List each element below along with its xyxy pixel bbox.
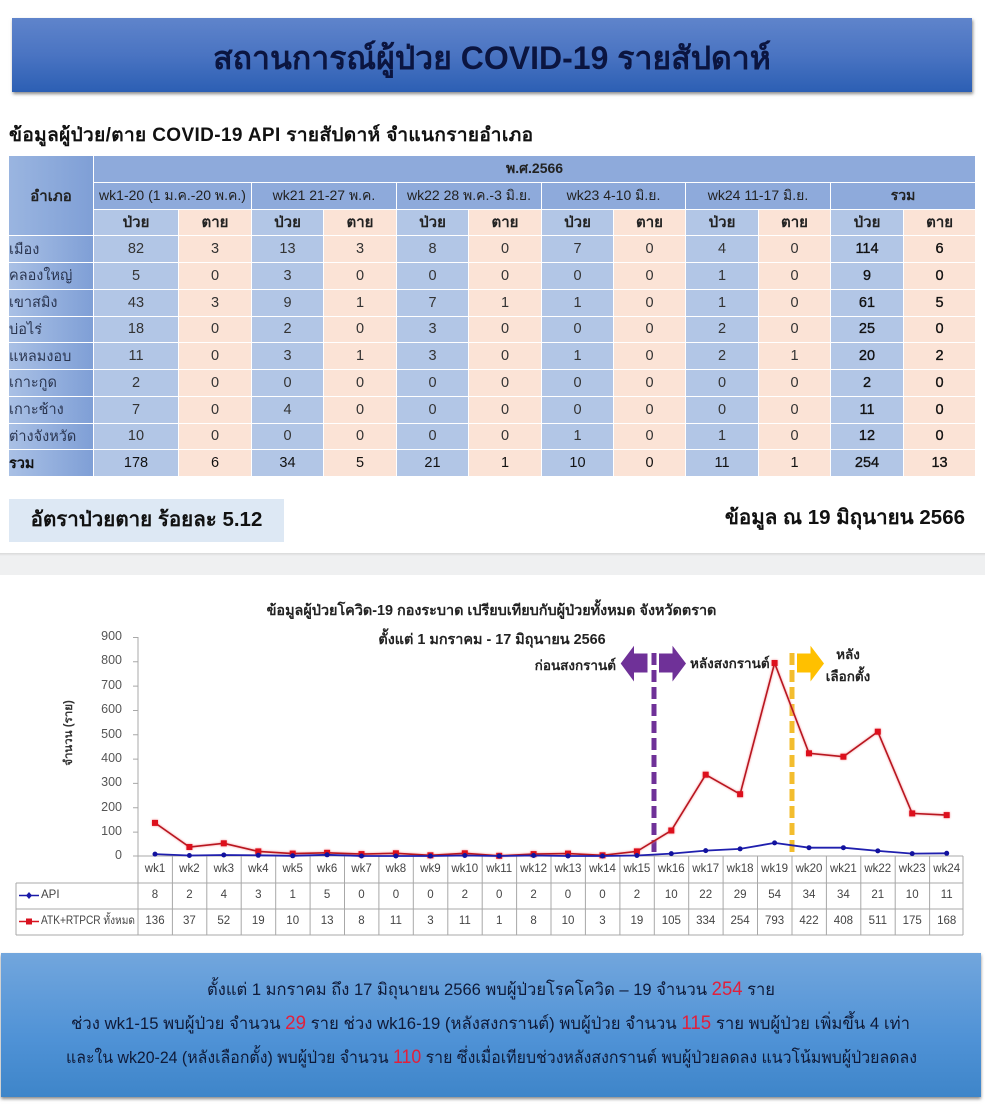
ATK+RTPCR row: 136 <box>145 915 165 927</box>
data table: cases and deaths by district: 13 <box>279 241 296 257</box>
data table: cases and deaths by district: 0 <box>573 268 582 284</box>
week labels: wk7 <box>350 863 372 875</box>
arrow: before Songkran <box>621 646 648 682</box>
data table: cases and deaths by district: 0 <box>790 375 799 391</box>
data table: cases and deaths by district <box>9 156 975 476</box>
data table: cases and deaths by district: 0 <box>211 321 219 337</box>
y axis: 300 <box>101 775 122 789</box>
data table: cases and deaths by district: 0 <box>790 402 799 418</box>
data table: cases and deaths by district: อำเภอ <box>30 188 72 205</box>
ATK+RTPCR row: 8 <box>530 915 537 927</box>
API row: API <box>41 889 60 901</box>
data table: cases and deaths by district: 12 <box>859 428 875 444</box>
data table: cases and deaths by district: 0 <box>645 455 654 471</box>
data table: cases and deaths by district: 0 <box>211 375 219 391</box>
data table: cases and deaths by district: 1 <box>501 455 509 471</box>
data table: cases and deaths by district: เกาะกูด <box>9 375 57 391</box>
data table: cases and deaths by district: 0 <box>501 348 509 364</box>
data table: cases and deaths by district: 0 <box>283 428 292 444</box>
ATK+RTPCR row: 168 <box>937 915 956 927</box>
table heading: ข้อมูลผู้ป่วย/ตาย COVID-19 API รายสัปดาห์ จำแนกรายอำเภอ <box>9 125 533 146</box>
API row: 4 <box>221 889 228 901</box>
week labels: wk2 <box>178 863 200 875</box>
y axis: 700 <box>101 678 122 692</box>
data table: cases and deaths by district: wk21 21-27 พ.ค. <box>273 187 375 203</box>
data table: cases and deaths by district: เกาะช้าง <box>9 402 64 418</box>
data table: cases and deaths by district: 0 <box>790 295 799 311</box>
data table: cases and deaths by district: 9 <box>863 268 871 284</box>
data table: cases and deaths by district: 5 <box>132 268 140 284</box>
y axis: 400 <box>101 751 122 765</box>
data table: cases and deaths by district: 0 <box>356 428 364 444</box>
ATK+RTPCR row <box>19 912 956 927</box>
arrow: after Songkran <box>659 646 686 682</box>
data table: cases and deaths by district: 0 <box>790 428 799 444</box>
data table: cases and deaths by district: 0 <box>356 268 364 284</box>
summary panel <box>1 953 981 1097</box>
data table: cases and deaths by district: 34 <box>279 455 296 471</box>
API row: 22 <box>699 889 712 901</box>
data table: cases and deaths by district: 0 <box>573 402 582 418</box>
ATK+RTPCR row: 10 <box>562 915 574 927</box>
y axis: 200 <box>101 800 122 814</box>
API line series <box>152 840 949 858</box>
API row: 5 <box>324 889 330 901</box>
chart title: ข้อมูลผู้ป่วยโควิด-19 กองระบาด เปรียบเทียบกับผู้ป่วยทั้งหมด จังหวัดตราด <box>267 599 716 619</box>
week labels: wk21 <box>829 863 857 875</box>
data table: cases and deaths by district: 5 <box>936 295 944 311</box>
data table: cases and deaths by district: 0 <box>645 428 654 444</box>
chart title: ตั้งแต่ 1 มกราคม - 17 มิถุนายน 2566 <box>378 628 606 648</box>
week labels: wk13 <box>554 863 581 875</box>
ATK+RTPCR row: 19 <box>631 915 643 927</box>
week labels: wk18 <box>726 863 754 875</box>
data table: cases and deaths by district: 0 <box>428 268 437 284</box>
data table: cases and deaths by district: 21 <box>424 455 441 471</box>
API row: 2 <box>462 889 468 901</box>
data table: cases and deaths by district: 1 <box>356 348 364 364</box>
API row: 29 <box>734 889 746 901</box>
API row: 0 <box>393 889 399 901</box>
week labels: wk6 <box>316 863 337 875</box>
data table: cases and deaths by district: 3 <box>283 348 292 364</box>
data table: cases and deaths by district: 2 <box>718 348 726 364</box>
ATK+RTPCR row: 511 <box>869 915 887 927</box>
data table: cases and deaths by district: ตาย <box>347 214 373 231</box>
API row: 21 <box>871 889 884 901</box>
data table: cases and deaths by district: 0 <box>501 241 509 257</box>
data table: cases and deaths by district: 0 <box>356 375 364 391</box>
data table: cases and deaths by district: 25 <box>859 321 875 337</box>
data table: cases and deaths by district: 0 <box>936 375 944 391</box>
data table: cases and deaths by district: 2 <box>283 321 292 337</box>
week labels: wk15 <box>622 863 650 875</box>
API row: 11 <box>941 889 953 901</box>
data table: cases and deaths by district: ป่วย <box>274 214 301 231</box>
API row: 0 <box>599 889 606 901</box>
y axis: 100 <box>101 824 122 838</box>
data table: cases and deaths by district: 10 <box>569 455 586 471</box>
y axis: 600 <box>101 702 122 716</box>
data table: cases and deaths by district: 178 <box>124 455 148 471</box>
data table: cases and deaths by district: เมือง <box>9 242 39 258</box>
data table: cases and deaths by district: ป่วย <box>123 214 149 231</box>
data table: cases and deaths by district: รวม <box>891 187 915 203</box>
data table: cases and deaths by district: 0 <box>645 268 654 284</box>
data table: cases and deaths by district: 0 <box>645 321 654 337</box>
data table: cases and deaths by district: 1 <box>718 268 726 284</box>
week labels: wk23 <box>898 863 926 875</box>
data table: cases and deaths by district: 0 <box>936 321 944 337</box>
API row: 2 <box>186 889 193 901</box>
data table: cases and deaths by district: 0 <box>283 375 292 391</box>
annotation: before Songkran: ก่อนสงกรานต์ <box>535 657 616 673</box>
week labels: wk9 <box>419 863 441 875</box>
data table: cases and deaths by district: 0 <box>211 268 219 284</box>
y axis: 0 <box>115 848 122 862</box>
summary text: และใน wk20-24 (หลังเลือกตั้ง) พบผู้ป่วย จำนวน 110 ราย ซึ่งเมื่อเทียบช่วงหลังสงกรานต์ พบผู้ป่วยลดลง แนวโน้มพบผู้ป่วยลดลง <box>66 1045 917 1068</box>
data table: cases and deaths by district: 3 <box>356 241 364 257</box>
chart title <box>267 599 716 648</box>
data table: cases and deaths by district: 2 <box>936 348 944 364</box>
week labels: wk22 <box>863 863 891 875</box>
data table: cases and deaths by district: 0 <box>645 348 654 364</box>
data table: cases and deaths by district: 0 <box>936 428 944 444</box>
API row: 1 <box>289 889 296 901</box>
ATK+RTPCR row: 3 <box>427 915 434 927</box>
data table: cases and deaths by district: ต่างจังหวัด <box>9 429 76 445</box>
data table: cases and deaths by district: 2 <box>132 375 140 391</box>
data table: cases and deaths by district: 1 <box>718 428 726 444</box>
week labels: wk14 <box>588 863 617 875</box>
data table: cases and deaths by district: wk24 11-17 มิ.ย. <box>708 187 808 203</box>
week labels: wk12 <box>519 863 547 875</box>
data table: cases and deaths by district: 0 <box>428 428 437 444</box>
ATK+RTPCR row: 793 <box>765 915 784 927</box>
data table: cases and deaths by district: 4 <box>718 241 726 257</box>
data table: cases and deaths by district: 7 <box>573 241 582 257</box>
data table: cases and deaths by district: 1 <box>790 348 799 364</box>
data table: cases and deaths by district: 0 <box>428 402 437 418</box>
data table: cases and deaths by district: 0 <box>573 321 582 337</box>
API row: 3 <box>255 889 262 901</box>
data table: cases and deaths by district: 11 <box>714 455 730 471</box>
API row: 2 <box>634 889 640 901</box>
data table: cases and deaths by district: ตาย <box>636 214 663 231</box>
data table: cases and deaths by district: 3 <box>211 241 219 257</box>
week labels: wk8 <box>385 863 406 875</box>
data table: cases and deaths by district: 0 <box>936 268 944 284</box>
week labels: wk20 <box>795 863 822 875</box>
data table: cases and deaths by district: 1 <box>573 428 582 444</box>
data table: cases and deaths by district: 43 <box>128 295 144 311</box>
week labels: wk24 <box>932 863 961 875</box>
data table: cases and deaths by district: 3 <box>428 321 437 337</box>
data table: cases and deaths by district: ตาย <box>202 214 228 231</box>
week labels: wk17 <box>691 863 719 875</box>
week labels <box>144 863 961 875</box>
ATK+RTPCR row: 408 <box>834 915 853 927</box>
data table: cases and deaths by district: 254 <box>855 455 879 471</box>
API row: 10 <box>665 889 678 901</box>
data table: cases and deaths by district: 1 <box>501 295 509 311</box>
data table grid <box>16 856 963 935</box>
data table: cases and deaths by district: 61 <box>859 295 875 311</box>
data table: cases and deaths by district: 3 <box>283 268 292 284</box>
purple dashed line: Songkran <box>652 653 656 854</box>
data table: cases and deaths by district: 9 <box>283 295 292 311</box>
week labels: wk5 <box>281 863 303 875</box>
title banner: สถานการณ์ผู้ป่วย COVID-19 รายสัปดาห์ <box>213 40 771 76</box>
data table: cases and deaths by district: wk1-20 (1 ม.ค.-20 พ.ค.) <box>99 187 246 203</box>
data table: cases and deaths by district: 2 <box>863 375 871 391</box>
data table: cases and deaths by district: 7 <box>132 402 140 418</box>
API row: 0 <box>565 889 571 901</box>
data table: cases and deaths by district: 0 <box>501 402 509 418</box>
data table: cases and deaths by district: 5 <box>356 455 364 471</box>
API row: 34 <box>837 889 850 901</box>
ATK+RTPCR row: 105 <box>662 915 681 927</box>
line chart with data table <box>16 599 964 936</box>
annotation: after election: หลัง <box>836 647 860 662</box>
data table: cases and deaths by district: รวม <box>9 456 34 472</box>
data table: cases and deaths by district: 0 <box>573 375 582 391</box>
annotation: after Songkran: หลังสงกรานต์ <box>690 655 770 671</box>
ATK+RTPCR row: 11 <box>459 915 471 927</box>
title banner <box>12 18 972 92</box>
API row: 54 <box>768 889 782 901</box>
data table: cases and deaths by district: 13 <box>931 455 948 471</box>
API row: 8 <box>152 889 158 901</box>
y axis title: จำนวน (ราย) <box>61 700 75 766</box>
data table: cases and deaths by district: 82 <box>128 241 144 257</box>
data table: cases and deaths by district: 11 <box>859 402 875 418</box>
data table: cases and deaths by district: 0 <box>645 402 654 418</box>
data table: cases and deaths by district: 0 <box>501 375 509 391</box>
data table: cases and deaths by district: 0 <box>645 295 654 311</box>
ATK+RTPCR row: ATK+RTPCR ทั้งหมด <box>41 912 135 927</box>
data table: cases and deaths by district: ตาย <box>926 214 953 231</box>
annotation: after election: เลือกตั้ง <box>826 666 870 684</box>
data table: cases and deaths by district: 0 <box>936 402 944 418</box>
ATK+RTPCR row: 422 <box>799 915 819 927</box>
data table: cases and deaths by district: 0 <box>718 375 726 391</box>
data table: cases and deaths by district: 1 <box>790 455 799 471</box>
data table: cases and deaths by district: บ่อไร่ <box>9 322 42 338</box>
fatality rate callout <box>9 499 284 542</box>
data table: cases and deaths by district: 0 <box>211 428 219 444</box>
data table: cases and deaths by district: 2 <box>718 321 726 337</box>
ATK+RTPCR row: 11 <box>390 915 402 927</box>
week labels: wk4 <box>247 863 269 875</box>
API row: 10 <box>906 889 919 901</box>
data table: cases and deaths by district: คลองใหญ่ <box>9 268 72 284</box>
y axis: 800 <box>101 653 122 667</box>
data table: cases and deaths by district: 0 <box>211 402 219 418</box>
data table: cases and deaths by district: 0 <box>501 268 509 284</box>
API row: 34 <box>803 889 816 901</box>
data table: cases and deaths by district: 11 <box>128 348 144 364</box>
ATK+RTPCR row: 1 <box>496 915 502 927</box>
data date note: ข้อมูล ณ 19 มิถุนายน 2566 <box>725 506 965 529</box>
data table: cases and deaths by district: 0 <box>211 348 219 364</box>
fatality rate callout: อัตราป่วยตาย ร้อยละ 5.12 <box>31 508 262 531</box>
ATK+RTPCR row: 3 <box>599 915 606 927</box>
data table: cases and deaths by district: ตาย <box>492 214 518 231</box>
data table: cases and deaths by district: พ.ศ.2566 <box>506 160 563 176</box>
data table: cases and deaths by district: 3 <box>428 348 437 364</box>
y axis <box>101 629 963 935</box>
data table: cases and deaths by district: 0 <box>790 321 799 337</box>
data table: cases and deaths by district: 6 <box>211 455 219 471</box>
ATK+RTPCR row: 8 <box>358 915 365 927</box>
API row: 0 <box>358 889 365 901</box>
week labels: wk11 <box>485 863 512 875</box>
data table: cases and deaths by district: ตาย <box>781 214 808 231</box>
week labels: wk3 <box>213 863 234 875</box>
summary text: ช่วง wk1-15 พบผู้ป่วย จำนวน 29 ราย ช่วง wk16-19 (หลังสงกรานต์) พบผู้ป่วย จำนวน 115 ราย พบผู้ป่วย เพิ่มขึ้น 4 เท่า <box>71 1011 910 1034</box>
API row: 2 <box>530 889 537 901</box>
data table: cases and deaths by district: ป่วย <box>419 214 446 231</box>
data table: cases and deaths by district: 18 <box>128 321 144 337</box>
summary text: ตั้งแต่ 1 มกราคม ถึง 17 มิถุนายน 2566 พบผู้ป่วยโรคโควิด – 19 จำนวน 254 ราย <box>207 977 775 1000</box>
data table: cases and deaths by district: 0 <box>790 268 799 284</box>
data table: cases and deaths by district: 20 <box>859 348 875 364</box>
data table: cases and deaths by district: 0 <box>356 402 364 418</box>
ATK+RTPCR row: 37 <box>183 915 196 927</box>
data table: cases and deaths by district: 7 <box>428 295 437 311</box>
week labels: wk16 <box>657 863 685 875</box>
summary text <box>66 977 917 1068</box>
data table: cases and deaths by district: 0 <box>501 428 509 444</box>
ATK+RTPCR row: 334 <box>696 915 716 927</box>
ATK+RTPCR row: 175 <box>903 915 922 927</box>
week labels: wk10 <box>450 863 478 875</box>
ATK+RTPCR row: 13 <box>321 915 333 927</box>
data table: cases and deaths by district: ป่วย <box>709 214 735 231</box>
week labels: wk1 <box>144 863 165 875</box>
y axis: 500 <box>101 727 122 741</box>
data table: cases and deaths by district: ป่วย <box>854 214 880 231</box>
data table: cases and deaths by district: 0 <box>356 321 364 337</box>
data table: cases and deaths by district: 1 <box>573 295 582 311</box>
data table: cases and deaths by district: wk23 4-10 มิ.ย. <box>567 187 660 203</box>
y axis: 900 <box>101 629 122 643</box>
data table: cases and deaths by district: 3 <box>211 295 219 311</box>
arrow: after election <box>797 646 824 682</box>
API row <box>19 889 953 901</box>
data table: cases and deaths by district: 1 <box>573 348 582 364</box>
ATK+RTPCR row: 52 <box>217 915 230 927</box>
data table: cases and deaths by district: แหลมงอบ <box>9 349 71 365</box>
data table: cases and deaths by district: ป่วย <box>564 214 591 231</box>
API row: 0 <box>427 889 434 901</box>
data table: cases and deaths by district: 0 <box>501 321 509 337</box>
ATK+RTPCR line series <box>152 660 950 859</box>
ATK+RTPCR row: 19 <box>252 915 265 927</box>
data table: cases and deaths by district: 8 <box>428 241 437 257</box>
data table: cases and deaths by district: 114 <box>855 241 879 257</box>
data table: cases and deaths by district: 4 <box>283 402 292 418</box>
data table: cases and deaths by district: 0 <box>718 402 726 418</box>
data table: cases and deaths by district: 1 <box>718 295 726 311</box>
data table: cases and deaths by district: 0 <box>645 375 654 391</box>
week labels: wk19 <box>760 863 788 875</box>
API row: 0 <box>496 889 502 901</box>
ATK+RTPCR row: 10 <box>286 915 299 927</box>
data table: cases and deaths by district: wk22 28 พ.ค.-3 มิ.ย. <box>407 187 531 203</box>
data table: cases and deaths by district: 1 <box>356 295 364 311</box>
annotation: after election <box>826 647 870 684</box>
data table: cases and deaths by district: เขาสมิง <box>9 295 58 311</box>
data table: cases and deaths by district: 0 <box>645 241 654 257</box>
yellow dashed line: election <box>790 653 794 854</box>
data table: cases and deaths by district: 6 <box>936 241 944 257</box>
ATK+RTPCR row: 254 <box>731 915 750 927</box>
data table: cases and deaths by district: 10 <box>128 428 144 444</box>
section separator band <box>0 553 985 575</box>
data table: cases and deaths by district: 0 <box>428 375 437 391</box>
data table: cases and deaths by district: 0 <box>790 241 799 257</box>
